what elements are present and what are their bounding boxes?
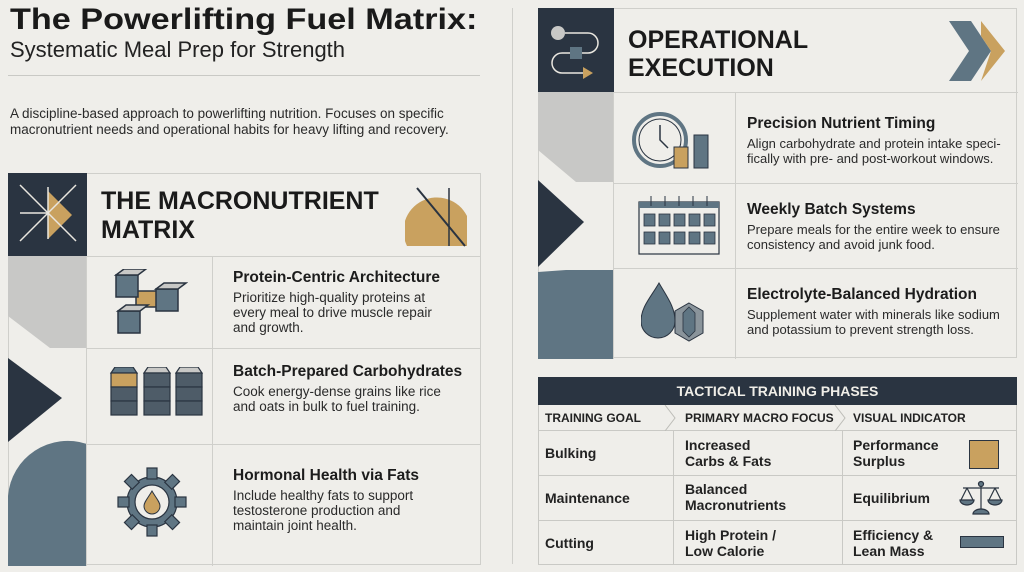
title: Systematic Meal Prep for Strength [10, 37, 345, 62]
text [233, 363, 462, 414]
text [747, 115, 1001, 166]
text: Prioritize high-quality proteins at every meal to drive muscle repair and growth. [233, 290, 432, 335]
row: bulking: Carbs & Fats [685, 453, 771, 469]
heading [628, 26, 808, 82]
row: maintenance: Macronutrients [685, 497, 786, 513]
row: bulking: Performance [853, 437, 939, 453]
column headers: VISUAL INDICATOR [853, 411, 966, 425]
row: bulking: Increased [685, 437, 750, 453]
row: batch [638, 196, 1000, 255]
text: Align carbohydrate and protein intake speci-fically with pre- and post-workout windows. [747, 136, 1001, 166]
row: maintenance [545, 480, 1003, 515]
row: maintenance: Equilibrium [853, 490, 930, 506]
text: Hormonal Health via Fats [233, 467, 419, 484]
header icon [8, 173, 87, 256]
heading: MATRIX [101, 216, 195, 244]
text: Include healthy fats to support testosterone production and maintain joint health. [233, 488, 413, 533]
column headers: PRIMARY MACRO FOCUS [685, 411, 834, 425]
icon: gear [117, 467, 187, 537]
text: Protein-Centric Architecture [233, 269, 440, 286]
text: Electrolyte-Balanced Hydration [747, 286, 977, 303]
icon: slate bar [960, 536, 1004, 548]
icon: drop & gem [641, 282, 704, 342]
panel: operational execution [538, 8, 1017, 358]
table: tactical training phases [538, 377, 1017, 565]
text: Cook energy-dense grains like rice and oats in bulk to fuel training. [233, 384, 441, 414]
heading [101, 187, 379, 244]
title [10, 3, 477, 62]
header icon [538, 8, 614, 92]
row: protein [114, 269, 440, 335]
icon: cubes [114, 269, 188, 334]
row: cutting: Low Calorie [685, 543, 764, 559]
row: timing [632, 112, 1001, 168]
row: bulking [545, 437, 999, 469]
left decorations [8, 256, 86, 566]
row: cutting: Lean Mass [853, 543, 925, 559]
intro text: A discipline-based approach to powerlifting nutrition. Focuses on specific macronutrient needs and operational habits for heavy lifting and recovery. [10, 106, 449, 137]
heading: OPERATIONAL [628, 26, 808, 54]
text [233, 269, 440, 335]
icon: deco semicircle [405, 187, 467, 247]
table header [538, 377, 1017, 405]
text: Weekly Batch Systems [747, 201, 916, 218]
text [747, 286, 1000, 337]
table header: TACTICAL TRAINING PHASES [677, 383, 878, 399]
panel: macronutrient matrix [8, 173, 481, 565]
title: The Powerlifting Fuel Matrix: [10, 3, 477, 36]
row: carbs [110, 363, 462, 416]
column headers [539, 405, 1016, 431]
text: Supplement water with minerals like sodium and potassium to prevent strength loss. [747, 307, 1000, 337]
icon: containers [110, 367, 203, 416]
icon: chevron [949, 21, 1005, 81]
icon: clock [632, 112, 708, 168]
column headers: TRAINING GOAL [545, 411, 641, 425]
row: maintenance: Maintenance [545, 490, 630, 506]
row: hydration [641, 282, 1000, 342]
row: cutting [545, 527, 1004, 559]
row: bulking: Bulking [545, 445, 596, 461]
row: cutting: High Protein / [685, 527, 776, 543]
icon: calendar [638, 196, 720, 255]
row: cutting: Cutting [545, 535, 594, 551]
left decorations [538, 92, 613, 359]
heading: THE MACRONUTRIENT [101, 187, 379, 215]
text: Precision Nutrient Timing [747, 115, 935, 132]
row: bulking: Surplus [853, 453, 905, 469]
row: maintenance: Balanced [685, 481, 747, 497]
row: fats [117, 467, 419, 537]
text [233, 467, 419, 533]
text: Prepare meals for the entire week to ensure consistency and avoid junk food. [747, 222, 1000, 252]
text: Batch-Prepared Carbohydrates [233, 363, 462, 380]
text [747, 201, 1000, 252]
icon: scale [959, 480, 1003, 515]
icon: gold square [969, 440, 999, 469]
row: cutting: Efficiency & [853, 527, 933, 543]
heading: EXECUTION [628, 54, 774, 82]
